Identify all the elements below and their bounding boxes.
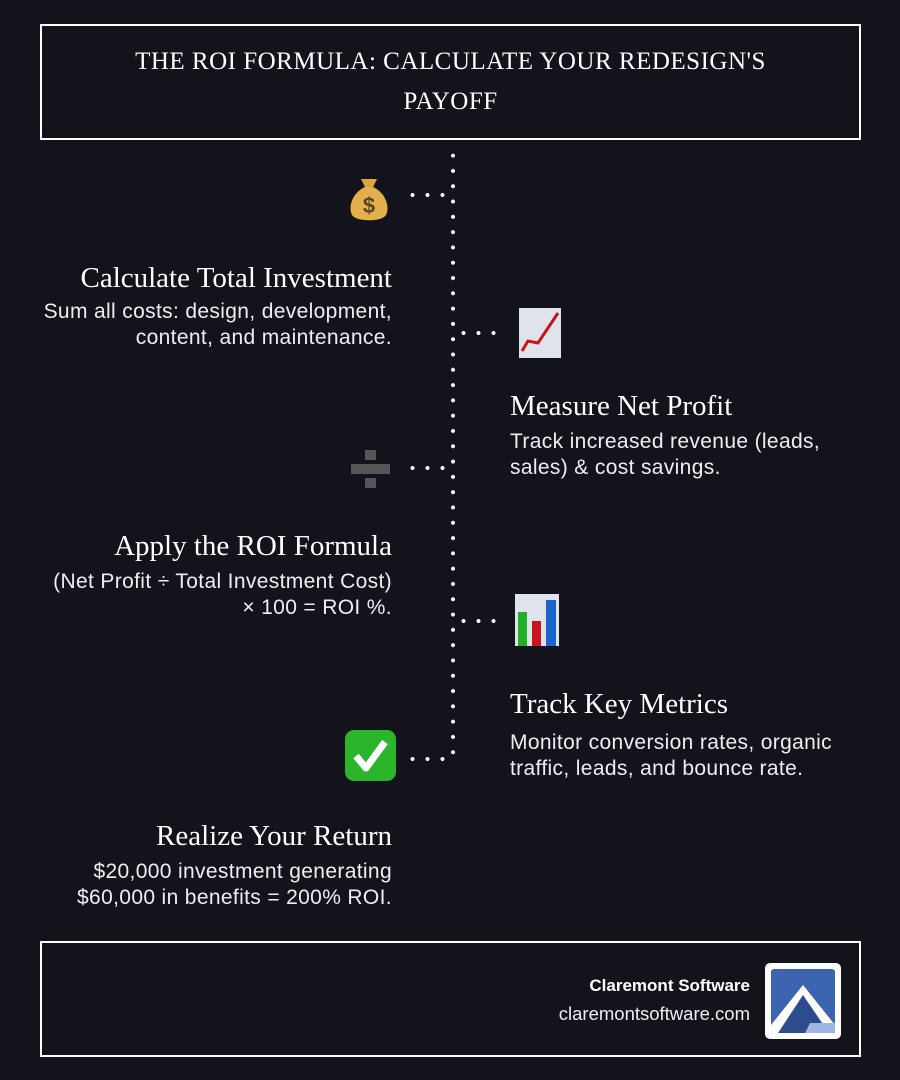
- timeline dotted line: [451, 148, 455, 764]
- step 5 text: $20,000 investment generating: [93, 860, 392, 883]
- title box: [40, 24, 861, 140]
- step 4 heading: Track Key Metrics: [510, 688, 728, 720]
- icon: bar chart: [515, 594, 559, 646]
- footer url: claremontsoftware.com: [559, 1003, 750, 1024]
- step 3 text: × 100 = ROI %.: [242, 596, 392, 619]
- connector dots 2: [456, 331, 504, 335]
- step 5 text: $60,000 in benefits = 200% ROI.: [77, 886, 392, 909]
- step 5 heading: Realize Your Return: [156, 820, 392, 852]
- step 5 text: [77, 860, 392, 909]
- step 3 heading: Apply the ROI Formula: [114, 530, 392, 562]
- logo: [765, 963, 841, 1039]
- step 1 text: [44, 300, 392, 349]
- step 4 text: [510, 731, 832, 780]
- step 2 text: [510, 430, 820, 479]
- footer brand name: Claremont Software: [589, 976, 750, 995]
- connector dots 4: [456, 619, 504, 623]
- icon: money bag: [350, 179, 388, 220]
- icon: money bag: $: [363, 193, 375, 218]
- icon: check mark: [345, 730, 396, 781]
- step 4 text: traffic, leads, and bounce rate.: [510, 757, 803, 780]
- connector dots 5: [405, 757, 453, 761]
- step 4 text: Monitor conversion rates, organic: [510, 731, 832, 754]
- footer box: [40, 941, 861, 1057]
- connector dots 3: [405, 466, 453, 470]
- connector dots 1: [405, 193, 453, 197]
- step 1 text: Sum all costs: design, development,: [44, 300, 392, 323]
- step 3 text: [53, 570, 392, 619]
- icon: divide: [351, 450, 390, 488]
- step 2 text: Track increased revenue (leads,: [510, 430, 820, 453]
- step 1 heading: Calculate Total Investment: [80, 262, 392, 294]
- step 1 text: content, and maintenance.: [136, 326, 392, 349]
- icon: chart increasing: [519, 308, 561, 358]
- step 3 text: (Net Profit ÷ Total Investment Cost): [53, 570, 392, 593]
- step 2 heading: Measure Net Profit: [510, 390, 732, 422]
- title box: THE ROI FORMULA: CALCULATE YOUR REDESIGN'S PAYOFF: [135, 48, 766, 115]
- step 2 text: sales) & cost savings.: [510, 456, 721, 479]
